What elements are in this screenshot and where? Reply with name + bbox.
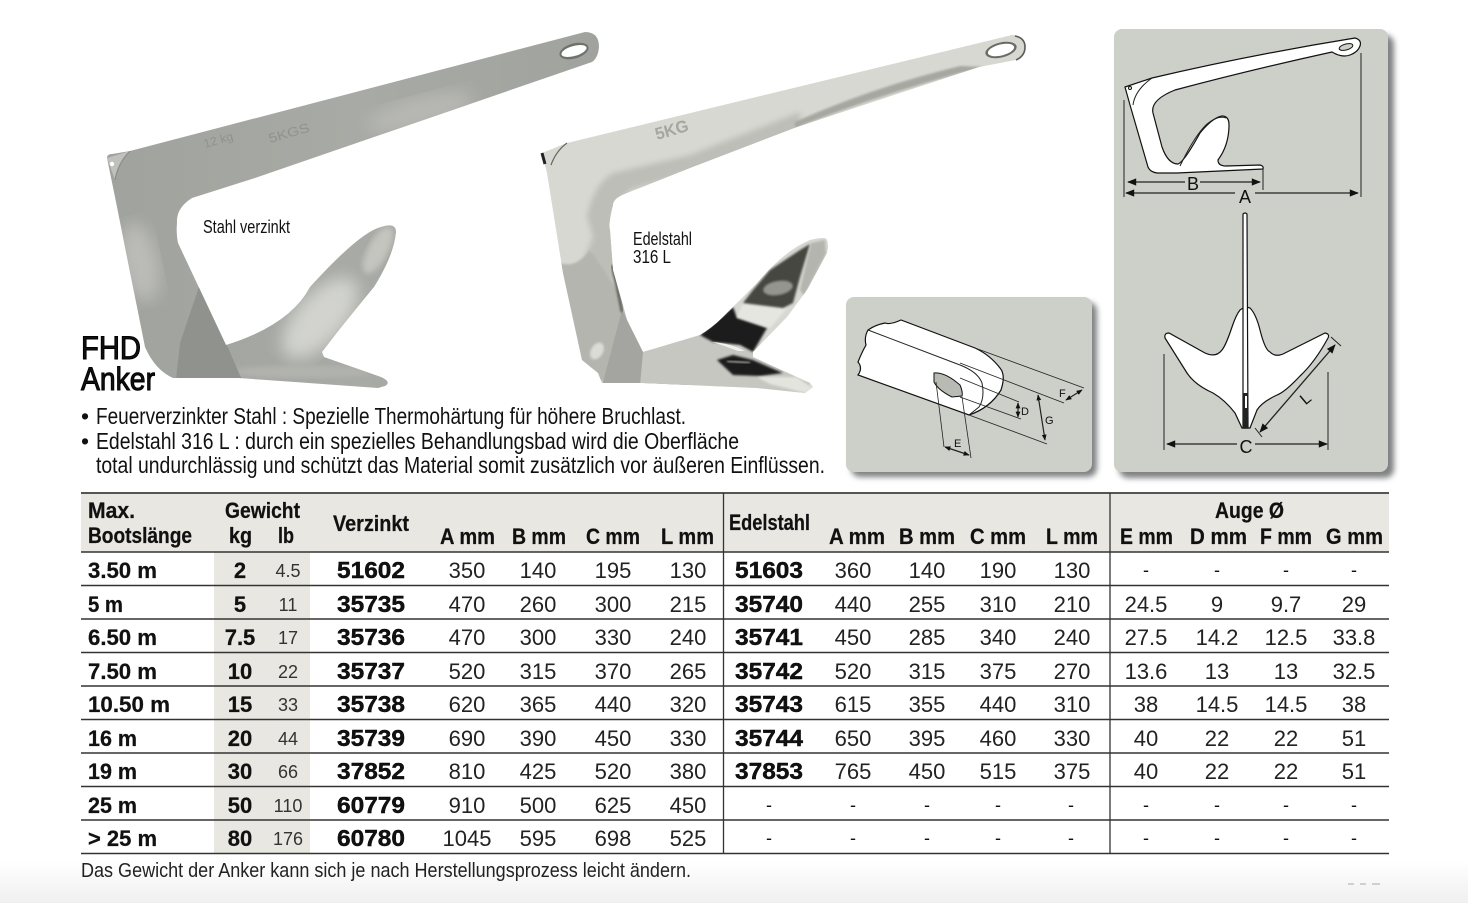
row: 19 m: 765 bbox=[835, 759, 871, 784]
row: 7.50 m: 13 bbox=[1274, 659, 1298, 684]
row: 10.50 m: 14.5 bbox=[1196, 692, 1238, 717]
text block: material description: total undurchlässig und schützt das Material somit zusätzlich vor äußeren Einflüssen. bbox=[96, 452, 825, 478]
table header: A mm bbox=[829, 524, 885, 549]
row: 7.50 m: 520 bbox=[835, 659, 871, 684]
table header: F mm bbox=[1260, 524, 1312, 549]
row: 5 m: 35735 bbox=[337, 591, 405, 617]
row: 6.50 m: 450 bbox=[835, 625, 871, 650]
row: 6.50 m: 7.5 bbox=[225, 625, 255, 650]
row: 19 m: 19 m bbox=[88, 759, 137, 784]
table header: L mm bbox=[1046, 524, 1098, 549]
row: 7.50 m: 13 bbox=[1205, 659, 1229, 684]
text block: material description bbox=[81, 403, 825, 478]
row: 5 m: 310 bbox=[980, 592, 1016, 617]
row: 16 m: 40 bbox=[1134, 726, 1158, 751]
row: 25 m: - bbox=[1214, 795, 1220, 815]
row: 3.50 m: 4.5 bbox=[275, 561, 301, 581]
inner underside band bbox=[583, 112, 800, 300]
row: 7.50 m: 7.50 m bbox=[88, 659, 157, 684]
row: 7.50 m: 22 bbox=[278, 662, 298, 682]
row: 16 m: 460 bbox=[980, 726, 1016, 751]
row: > 25 m: - bbox=[924, 828, 930, 848]
row: 10.50 m: 355 bbox=[909, 692, 945, 717]
row: 19 m: 22 bbox=[1205, 759, 1229, 784]
table header: Gewicht bbox=[225, 498, 301, 523]
row: 10.50 m: 38 bbox=[1342, 692, 1366, 717]
row: 6.50 m: 470 bbox=[449, 625, 485, 650]
table header: D mm bbox=[1190, 524, 1247, 549]
label: Edelstahl 316 L bbox=[633, 229, 692, 267]
side view drawing bbox=[1125, 38, 1360, 173]
row: 19 m: 66 bbox=[278, 762, 298, 782]
row: 25 m: - bbox=[1068, 795, 1074, 815]
row: > 25 m: > 25 m bbox=[88, 826, 157, 851]
row: 3.50 m: - bbox=[1351, 560, 1357, 580]
row: 7.50 m: 32.5 bbox=[1333, 659, 1375, 684]
row: 25 m: 910 bbox=[449, 793, 485, 818]
row: 5 m: 35740 bbox=[735, 591, 803, 617]
row: 7.50 m: 35742 bbox=[735, 658, 803, 684]
panel: anchor dimensions diagram bbox=[1114, 29, 1394, 478]
row: 10.50 m: 33 bbox=[278, 695, 298, 715]
row: > 25 m: - bbox=[1351, 828, 1357, 848]
dimension lines C and L: C bbox=[1240, 437, 1252, 457]
row: 19 m: 30 bbox=[228, 759, 252, 784]
row: 6.50 m: 340 bbox=[980, 625, 1016, 650]
row: 16 m: 395 bbox=[909, 726, 945, 751]
footnote: Das Gewicht der Anker kann sich je nach Herstellungsprozess leicht ändern. bbox=[81, 859, 691, 882]
row: 10.50 m: 615 bbox=[835, 692, 871, 717]
table header bbox=[88, 498, 1383, 549]
row: 5 m: 440 bbox=[835, 592, 871, 617]
dimension lines A and B bbox=[1124, 53, 1361, 207]
row: 16 m: 330 bbox=[670, 726, 706, 751]
front view drawing bbox=[1165, 213, 1329, 428]
table header: Edelstahl bbox=[729, 510, 810, 535]
row: 6.50 m: 12.5 bbox=[1265, 625, 1307, 650]
row: > 25 m: 525 bbox=[670, 826, 706, 851]
row: 25 m bbox=[88, 792, 1357, 818]
row: 3.50 m: - bbox=[1283, 560, 1289, 580]
panel: eye dimensions diagram: F bbox=[1059, 388, 1066, 400]
row: 6.50 m: 33.8 bbox=[1333, 625, 1375, 650]
row: 7.50 m: 520 bbox=[449, 659, 485, 684]
row: > 25 m: - bbox=[850, 828, 856, 848]
row: 10.50 m: 310 bbox=[1054, 692, 1090, 717]
row: 19 m: 375 bbox=[1054, 759, 1090, 784]
table header: C mm bbox=[970, 524, 1026, 549]
row: 16 m: 690 bbox=[449, 726, 485, 751]
row: 5 m: 11 bbox=[279, 595, 297, 615]
label: Edelstahl 316 L: 316 L bbox=[633, 247, 671, 267]
row: 3.50 m: 350 bbox=[449, 558, 485, 583]
row: 7.50 m: 265 bbox=[670, 659, 706, 684]
photo: stainless steel anchor: 5KG bbox=[653, 116, 691, 144]
row: > 25 m: 60780 bbox=[337, 825, 405, 851]
row: 16 m bbox=[88, 725, 1366, 751]
row: 19 m: 380 bbox=[670, 759, 706, 784]
row: > 25 m: 176 bbox=[273, 829, 303, 849]
row: > 25 m: - bbox=[1068, 828, 1074, 848]
dimension lines C and L bbox=[1164, 337, 1341, 457]
row: 3.50 m: 140 bbox=[909, 558, 945, 583]
row: 7.50 m bbox=[88, 658, 1375, 684]
row: 6.50 m: 285 bbox=[909, 625, 945, 650]
table: anchor specifications bbox=[81, 493, 1389, 854]
dimension lines A and B: A bbox=[1239, 187, 1251, 207]
table header: E mm bbox=[1120, 524, 1173, 549]
row: 7.50 m: 315 bbox=[520, 659, 556, 684]
row: 19 m: 810 bbox=[449, 759, 485, 784]
row: 6.50 m: 17 bbox=[278, 628, 298, 648]
row: > 25 m: - bbox=[1143, 828, 1149, 848]
row: 19 m bbox=[88, 758, 1366, 784]
row: > 25 m: 1045 bbox=[443, 826, 491, 851]
row: > 25 m: 80 bbox=[228, 826, 252, 851]
row: 19 m: 515 bbox=[980, 759, 1016, 784]
row: 3.50 m: - bbox=[1214, 560, 1220, 580]
fluke reflections bbox=[700, 307, 767, 352]
row: > 25 m: 595 bbox=[520, 826, 556, 851]
row: 25 m: - bbox=[1351, 795, 1357, 815]
row: 3.50 m: - bbox=[1143, 560, 1149, 580]
row: 6.50 m: 6.50 m bbox=[88, 625, 157, 650]
row: 25 m: 500 bbox=[520, 793, 556, 818]
label: Edelstahl 316 L: Edelstahl bbox=[633, 229, 692, 249]
row: 25 m: 60779 bbox=[337, 792, 405, 818]
photo: galvanized steel anchor: 12 kg bbox=[202, 129, 235, 151]
row: 16 m: 51 bbox=[1342, 726, 1366, 751]
row: 3.50 m: 130 bbox=[670, 558, 706, 583]
title: Anker bbox=[81, 361, 155, 397]
table header: A mm bbox=[440, 524, 495, 549]
row: 3.50 m: 190 bbox=[980, 558, 1016, 583]
shank streak bbox=[795, 66, 985, 128]
row: > 25 m: - bbox=[766, 828, 772, 848]
row: 6.50 m: 27.5 bbox=[1125, 625, 1167, 650]
fluke body bbox=[640, 335, 810, 393]
fluke spike bbox=[176, 287, 242, 378]
table header: B mm bbox=[512, 524, 566, 549]
row: 19 m: 40 bbox=[1134, 759, 1158, 784]
table header: Max. bbox=[88, 498, 135, 523]
row: 19 m: 520 bbox=[595, 759, 631, 784]
row: 3.50 m: 51602 bbox=[337, 557, 405, 583]
row: 19 m: 450 bbox=[909, 759, 945, 784]
title: FHD bbox=[81, 330, 141, 366]
row: > 25 m: - bbox=[1214, 828, 1220, 848]
row: 6.50 m: 35736 bbox=[337, 624, 405, 650]
row: 7.50 m: 375 bbox=[980, 659, 1016, 684]
table header: kg bbox=[229, 523, 252, 548]
row: 25 m: 450 bbox=[670, 793, 706, 818]
row: 10.50 m: 14.5 bbox=[1265, 692, 1307, 717]
title bbox=[81, 330, 155, 397]
row: 5 m: 9.7 bbox=[1271, 592, 1301, 617]
row: 3.50 m: 360 bbox=[835, 558, 871, 583]
dimension lines A and B: B bbox=[1187, 174, 1199, 194]
row: 16 m: 16 m bbox=[88, 726, 137, 751]
panel: eye dimensions diagram bbox=[846, 297, 1097, 477]
row: 7.50 m: 315 bbox=[909, 659, 945, 684]
table header: G mm bbox=[1326, 524, 1383, 549]
text block: material description: Edelstahl 316 L : durch ein spezielles Behandlungsbad wird die Oberfläche bbox=[96, 428, 739, 454]
photo: galvanized steel anchor: 5KGS bbox=[267, 120, 312, 146]
row: 10.50 m: 620 bbox=[449, 692, 485, 717]
row: > 25 m bbox=[88, 825, 1357, 851]
row: 10.50 m: 38 bbox=[1134, 692, 1158, 717]
lower leg shade bbox=[558, 250, 650, 385]
row: 19 m: 37853 bbox=[735, 758, 803, 784]
row: 19 m: 22 bbox=[1274, 759, 1298, 784]
table header: C mm bbox=[586, 524, 640, 549]
row: 7.50 m: 270 bbox=[1054, 659, 1090, 684]
photo: stainless steel anchor bbox=[535, 30, 1035, 400]
row: > 25 m: - bbox=[995, 828, 1001, 848]
row: 10.50 m: 365 bbox=[520, 692, 556, 717]
row: > 25 m: - bbox=[1283, 828, 1289, 848]
row: 16 m: 450 bbox=[595, 726, 631, 751]
row: 6.50 m: 240 bbox=[1054, 625, 1090, 650]
row: 7.50 m: 370 bbox=[595, 659, 631, 684]
row: 25 m: 50 bbox=[228, 793, 252, 818]
row: 5 m: 215 bbox=[670, 592, 706, 617]
row: 16 m: 390 bbox=[520, 726, 556, 751]
row: 19 m: 37852 bbox=[337, 758, 405, 784]
row: 25 m: 625 bbox=[595, 793, 631, 818]
row: 10.50 m: 320 bbox=[670, 692, 706, 717]
dimension lines C and L: L bbox=[1297, 390, 1315, 409]
row: 7.50 m: 35737 bbox=[337, 658, 405, 684]
row: 10.50 m: 35743 bbox=[735, 691, 803, 717]
row: 6.50 m bbox=[88, 624, 1375, 650]
row: 3.50 m: 140 bbox=[520, 558, 556, 583]
panel: eye dimensions diagram: E bbox=[954, 438, 961, 450]
text block: material description: • bbox=[81, 428, 89, 454]
row: 16 m: 22 bbox=[1205, 726, 1229, 751]
row: 6.50 m: 35741 bbox=[735, 624, 803, 650]
row: 3.50 m: 3.50 m bbox=[88, 558, 157, 583]
table header: Bootslänge bbox=[88, 523, 192, 548]
row: 7.50 m: 10 bbox=[228, 659, 252, 684]
row: 5 m: 300 bbox=[595, 592, 631, 617]
table header: Verzinkt bbox=[333, 511, 410, 536]
row: 10.50 m bbox=[88, 691, 1366, 717]
row: 3.50 m bbox=[88, 557, 1357, 583]
row: 16 m: 44 bbox=[278, 729, 298, 749]
table header: lb bbox=[278, 523, 294, 548]
photo: galvanized steel anchor bbox=[100, 25, 610, 395]
row: 10.50 m: 35738 bbox=[337, 691, 405, 717]
row: 5 m: 9 bbox=[1211, 592, 1223, 617]
row: 3.50 m: 130 bbox=[1054, 558, 1090, 583]
row: 6.50 m: 14.2 bbox=[1196, 625, 1238, 650]
row: 3.50 m: 195 bbox=[595, 558, 631, 583]
row: 16 m: 650 bbox=[835, 726, 871, 751]
panel: eye dimensions diagram: D bbox=[1021, 406, 1029, 418]
row: 6.50 m: 240 bbox=[670, 625, 706, 650]
table header: Auge Ø bbox=[1215, 498, 1284, 523]
row: 19 m: 51 bbox=[1342, 759, 1366, 784]
row: 25 m: - bbox=[850, 795, 856, 815]
row: 10.50 m: 10.50 m bbox=[88, 692, 170, 717]
panel: eye dimensions diagram: G bbox=[1045, 415, 1054, 427]
row: > 25 m: 698 bbox=[595, 826, 631, 851]
label: Stahl verzinkt: Stahl verzinkt bbox=[203, 217, 290, 237]
row: 3.50 m: 2 bbox=[234, 558, 246, 583]
row: 6.50 m: 300 bbox=[520, 625, 556, 650]
row: 6.50 m: 330 bbox=[595, 625, 631, 650]
row: 16 m: 35739 bbox=[337, 725, 405, 751]
row: 5 m: 5 bbox=[234, 592, 246, 617]
table header: B mm bbox=[899, 524, 955, 549]
row: 16 m: 330 bbox=[1054, 726, 1090, 751]
row: 25 m: - bbox=[1283, 795, 1289, 815]
row: 5 m: 260 bbox=[520, 592, 556, 617]
row: 3.50 m: 51603 bbox=[735, 557, 803, 583]
row: 16 m: 35744 bbox=[735, 725, 803, 751]
row: 16 m: 22 bbox=[1274, 726, 1298, 751]
row: 25 m: - bbox=[995, 795, 1001, 815]
row: 10.50 m: 440 bbox=[595, 692, 631, 717]
row: 5 m: 29 bbox=[1342, 592, 1366, 617]
row: 19 m: 425 bbox=[520, 759, 556, 784]
row: 25 m: - bbox=[924, 795, 930, 815]
row: 25 m: - bbox=[1143, 795, 1149, 815]
row: 25 m: - bbox=[766, 795, 772, 815]
row: 5 m: 210 bbox=[1054, 592, 1090, 617]
row: 5 m bbox=[88, 591, 1366, 617]
text block: material description: Feuerverzinkter Stahl : Spezielle Thermohärtung für höhere Bruchlast. bbox=[96, 403, 686, 429]
row: 5 m: 5 m bbox=[88, 592, 123, 617]
row: 5 m: 24.5 bbox=[1125, 592, 1167, 617]
row: 5 m: 470 bbox=[449, 592, 485, 617]
row: 7.50 m: 13.6 bbox=[1125, 659, 1167, 684]
row: 10.50 m: 440 bbox=[980, 692, 1016, 717]
row: 25 m: 25 m bbox=[88, 793, 137, 818]
text block: material description: • bbox=[81, 403, 89, 429]
row: 25 m: 110 bbox=[274, 796, 302, 816]
row: 5 m: 255 bbox=[909, 592, 945, 617]
table header: L mm bbox=[661, 524, 714, 549]
row: 16 m: 20 bbox=[228, 726, 252, 751]
row: 10.50 m: 15 bbox=[228, 692, 252, 717]
